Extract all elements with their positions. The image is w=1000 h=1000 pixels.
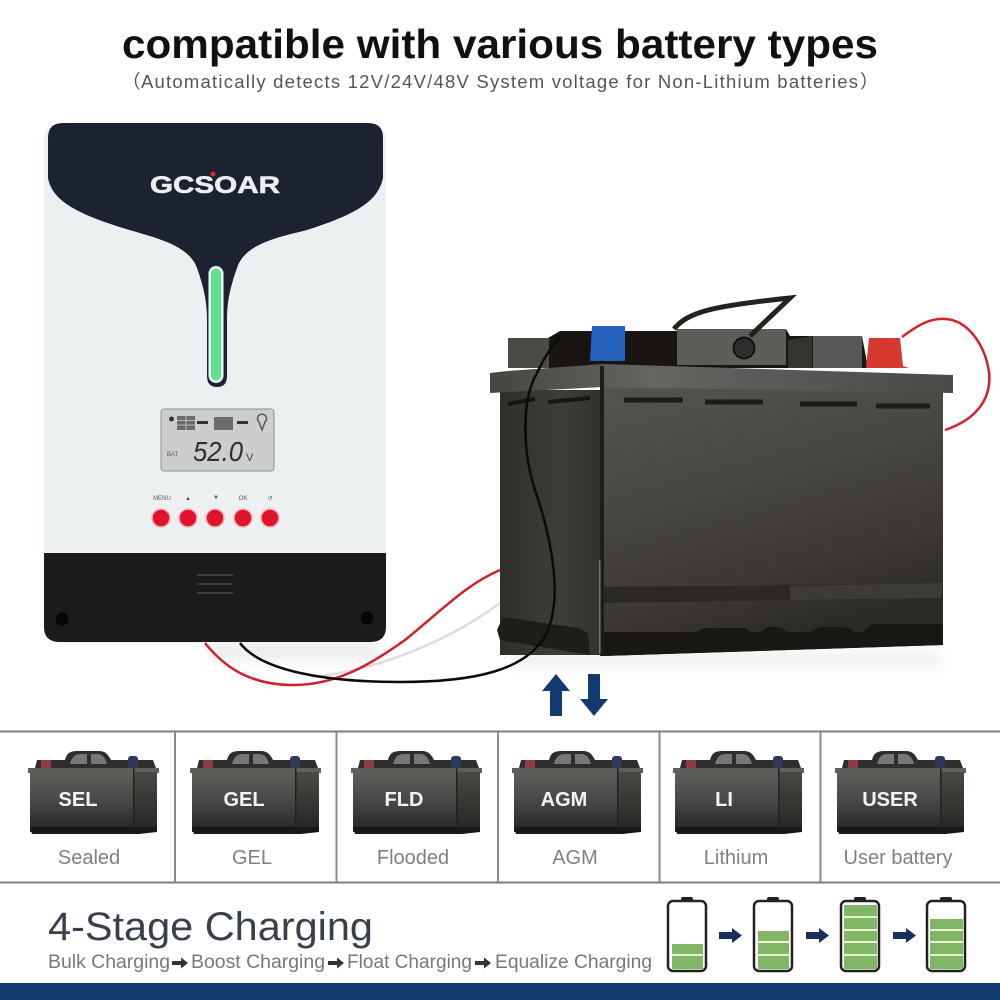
- battery type: GEL: [190, 751, 321, 869]
- charging stages text: Equalize Charging: [495, 952, 652, 973]
- battery type: Flooded: FLD: [385, 789, 423, 811]
- subtitle: ）: [860, 71, 879, 92]
- subtitle: （: [122, 71, 141, 92]
- main battery: [240, 298, 989, 682]
- controller dark top cap: [48, 123, 383, 387]
- button labels: ▼: [213, 495, 219, 501]
- battery type: User battery: USER: [862, 789, 918, 811]
- battery type: Lithium: [673, 751, 804, 869]
- charging stages text: [48, 952, 652, 973]
- 4-stage charging heading: 4-Stage Charging: [48, 905, 373, 949]
- base vents: [197, 575, 233, 593]
- LCD display: BAT: [167, 452, 179, 458]
- battery type: Sealed: [28, 751, 159, 869]
- battery type: Flooded: [351, 751, 482, 869]
- title: compatible with various battery types: [122, 21, 878, 67]
- LCD display: 52.0: [193, 436, 243, 467]
- side vents: [508, 398, 590, 404]
- battery types grid: [0, 732, 1000, 882]
- subtitle: Automatically detects 12V/24V/48V System voltage for Non-Lithium batteries: [141, 71, 858, 92]
- battery type: AGM: AGM: [541, 789, 587, 811]
- battery type: User battery: User battery: [844, 847, 952, 869]
- stage 4 battery: [927, 897, 965, 971]
- battery top blocks: [508, 329, 868, 368]
- stage 1 battery: [668, 897, 706, 971]
- battery type: Sealed: Sealed: [58, 847, 120, 869]
- arrow: [719, 928, 742, 943]
- footer band: [0, 983, 1000, 1000]
- battery type: User battery: [835, 751, 966, 869]
- corner seam: [600, 366, 604, 656]
- charge controller: [44, 123, 386, 643]
- red wire to terminal: [902, 319, 989, 430]
- arrow: [893, 928, 916, 943]
- mounting screws: [56, 612, 374, 626]
- battery type: Lithium: Lithium: [704, 847, 768, 869]
- wires: [205, 570, 500, 685]
- charging stages text: Bulk Charging: [48, 952, 170, 973]
- button labels: ▲: [185, 496, 191, 502]
- LCD display: V: [246, 452, 254, 464]
- charge stage batteries: [668, 897, 965, 971]
- brand logo: GCSOAR: [150, 172, 280, 199]
- LCD display: [161, 409, 274, 471]
- button labels: MENU: [153, 496, 171, 502]
- charging stages text: Float Charging: [347, 952, 472, 973]
- battery base: [604, 624, 943, 656]
- battery side face: [500, 390, 600, 655]
- battery type: AGM: [512, 751, 643, 869]
- battery lid: [490, 364, 953, 393]
- red buttons: [152, 509, 279, 527]
- battery type: GEL: GEL: [232, 847, 272, 869]
- battery handle: [674, 298, 790, 336]
- controller body: [44, 123, 386, 643]
- battery type: Flooded: Flooded: [377, 847, 449, 869]
- stage 2 battery: [754, 897, 792, 971]
- blue terminal: [590, 326, 625, 361]
- battery type: Sealed: SEL: [59, 789, 97, 811]
- green status light: [208, 266, 224, 383]
- battery type: Lithium: LI: [715, 789, 733, 811]
- button labels: ↺: [267, 495, 273, 502]
- red terminal: [866, 338, 909, 368]
- arrow: [806, 928, 829, 943]
- battery type: GEL: GEL: [223, 789, 265, 811]
- battery lower band: [604, 583, 942, 603]
- up and down arrows: [542, 674, 608, 716]
- battery type: AGM: AGM: [552, 847, 598, 869]
- button labels: [153, 495, 273, 502]
- charging stages text: Boost Charging: [191, 952, 325, 973]
- controller black base: [44, 553, 386, 642]
- ground shadows: [210, 640, 940, 664]
- front vents: [624, 400, 930, 406]
- button labels: OK: [239, 496, 247, 502]
- side foot: [497, 617, 590, 655]
- battery front face: [603, 386, 943, 656]
- stage 3 battery: [841, 897, 879, 971]
- black wire: [240, 336, 561, 682]
